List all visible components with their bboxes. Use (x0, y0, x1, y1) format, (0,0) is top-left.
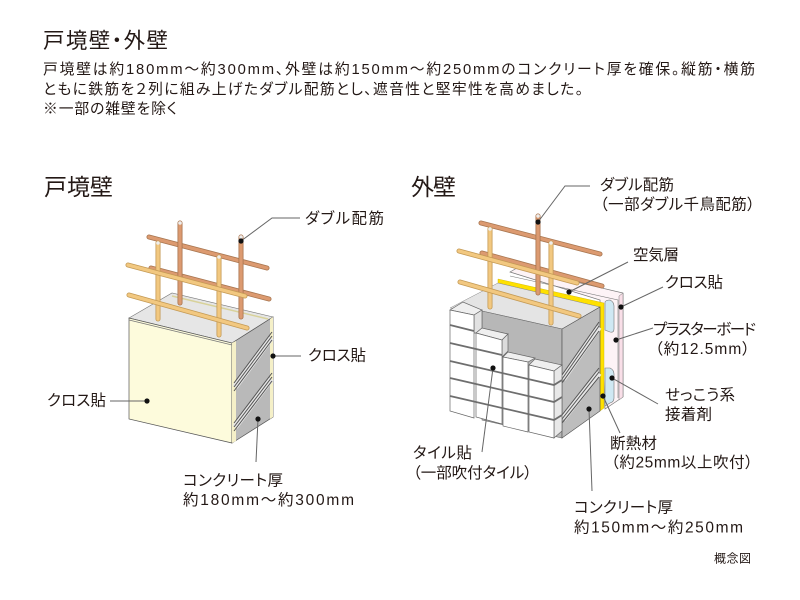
side rebar lines (562, 322, 599, 423)
labels: exterior wall: 空気層 (633, 246, 679, 264)
wall front face (129, 318, 232, 443)
labels: exterior wall: せっこう系 (665, 386, 735, 404)
labels: party wall (47, 208, 384, 509)
wall top (129, 293, 273, 343)
labels: party wall: 約180mm～約300mm (183, 491, 354, 509)
labels: party wall: コンクリート厚 (183, 472, 283, 490)
concrete exposed front (482, 311, 562, 438)
diagram: party wall (128, 221, 273, 443)
labels: exterior wall: 断熱材 (610, 434, 657, 452)
labels: exterior wall: （一部吹付タイル） (413, 464, 532, 482)
concrete side (562, 307, 600, 438)
tiles (450, 302, 562, 438)
labels: exterior wall: （約25mm以上吹付） (611, 454, 753, 472)
caption: conceptual diagram: 概念図 (714, 552, 751, 566)
wall side face (232, 317, 273, 443)
diagram: exterior wall (450, 214, 623, 438)
description text block: 戸境壁は約180mm～約300mm、外壁は約150mm～約250mmのコンクリート厚を確保。縦筋・横筋 (43, 61, 755, 78)
labels: exterior wall: コンクリート厚 (574, 498, 673, 516)
title: 戸境壁・外壁 (43, 29, 168, 53)
labels: exterior wall: 約150mm～約250mm (574, 518, 743, 536)
tile joints (450, 325, 562, 420)
labels: exterior wall: （一部ダブル千鳥配筋） (600, 194, 755, 214)
description text block (43, 61, 755, 118)
labels: exterior wall: （約12.5mm） (655, 340, 750, 358)
insulation, yellow (498, 279, 604, 411)
side rebar lines (234, 332, 272, 431)
description text block: ※一部の雑壁を除く (43, 100, 177, 118)
labels: exterior wall: 接着剤 (665, 406, 712, 424)
air layer and adhesive dabs (605, 300, 614, 332)
heading: party wall: 戸境壁 (44, 174, 113, 200)
labels: party wall: クロス貼 (47, 392, 106, 410)
leader lines and dots (110, 186, 663, 491)
rebar (459, 214, 602, 323)
back layers: plasterboard (510, 268, 623, 409)
labels: exterior wall (413, 175, 756, 536)
labels: exterior wall: クロス貼 (665, 274, 723, 292)
concrete top (450, 283, 600, 329)
labels: party wall: クロス貼 (308, 346, 366, 364)
labels: party wall: ダブル配筋 (305, 208, 384, 228)
heading: exterior wall: 外壁 (411, 174, 456, 200)
description text block: ともに鉄筋を２列に組み上げたダブル配筋とし、遮音性と堅牢性を高めました。 (43, 80, 583, 98)
labels: exterior wall: タイル貼 (413, 444, 472, 462)
back rebar, brown (128, 221, 269, 335)
labels: exterior wall: ダブル配筋 (600, 175, 674, 194)
labels: exterior wall: プラスターボード (653, 320, 756, 338)
